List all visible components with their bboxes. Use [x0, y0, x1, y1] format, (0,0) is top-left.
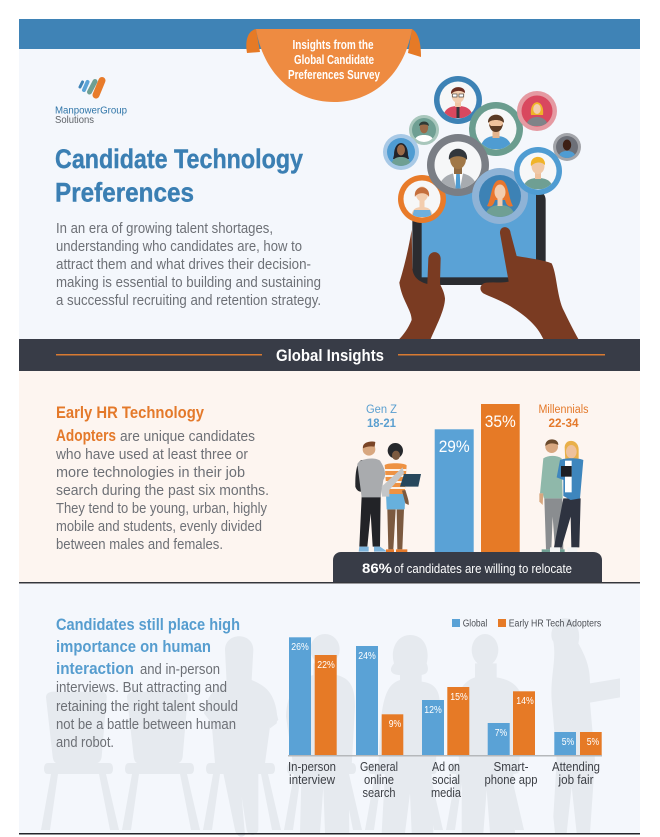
bar: Gen Z 29% [435, 429, 474, 552]
bar: Millennials 35% [481, 404, 520, 552]
logo: Solutions [55, 115, 94, 126]
intro text: understanding who candidates are, how to [56, 239, 302, 255]
background silhouettes [41, 618, 620, 837]
group: general online search: 24% [358, 651, 376, 662]
logo [55, 80, 127, 126]
group: in-person interview: 22% [317, 660, 335, 671]
top blue bar [19, 19, 640, 49]
legend: Global [463, 618, 487, 630]
group: smartphone app: phone app [484, 773, 538, 787]
title [55, 144, 303, 208]
label: Millennials [538, 404, 589, 430]
group: in-person interview [288, 637, 337, 787]
group: in-person interview: 26% [291, 642, 309, 653]
early adopters text: They tend to be young, urban, highly [56, 501, 268, 517]
human interaction text [56, 615, 240, 751]
group: in-person interview: interview [289, 773, 336, 787]
label: Millennials: 22-34 [548, 418, 579, 430]
people: Gen Z couple [355, 441, 421, 552]
intro text: attract them and what drives their decision- [56, 257, 311, 273]
survey banner: Preferences Survey [288, 67, 381, 82]
early adopters text: who have used at least three or [55, 447, 248, 463]
early adopters text: mobile and students, evenly divided [56, 519, 262, 535]
panel: header [19, 19, 640, 339]
group: general online search: search [362, 786, 396, 800]
callout: relocate: of candidates are willing to relocate [394, 561, 572, 576]
bar: Millennials 35%: 35% [485, 412, 516, 431]
group: general online search: online [364, 773, 394, 787]
early adopters text: more technologies in their job [56, 465, 245, 481]
group: smartphone app: 14% [516, 696, 534, 707]
group: general online search [356, 646, 403, 800]
bar: Gen Z 29%: 29% [439, 437, 470, 456]
group: ad on social media: social [432, 773, 460, 787]
survey banner [246, 29, 421, 102]
section band: Global Insights: Global Insights [276, 346, 384, 365]
panel: human interaction [19, 584, 640, 837]
group: smartphone app: 7% [495, 728, 507, 739]
illustration: tablet and hands [399, 190, 578, 339]
title: Preferences [55, 178, 194, 208]
avatar: bearded man [469, 102, 523, 156]
group: ad on social media: 15% [450, 692, 468, 703]
avatar: woman with dark hair [383, 134, 419, 170]
seated and standing people, right [270, 618, 620, 833]
panel: early adopters [19, 371, 640, 583]
label: Gen Z: Gen Z [366, 404, 397, 416]
intro text: a successful recruiting and retention strategy. [56, 293, 321, 309]
group: attending job fair [552, 732, 602, 787]
callout: relocate [333, 552, 602, 582]
early adopters text: between males and females. [56, 537, 223, 553]
legend: Early HR Tech Adopters [509, 618, 601, 630]
legend [452, 618, 601, 630]
group: ad on social media: 12% [424, 705, 442, 716]
early adopters text: are unique candidates [120, 429, 255, 445]
avatar: orange ring woman [398, 175, 446, 223]
avatar: man in suit [427, 134, 489, 196]
survey banner: Insights from the [292, 37, 374, 52]
people: Millennial couple [539, 439, 583, 552]
early adopters text [55, 403, 269, 553]
early adopters text: Adopters [56, 426, 116, 445]
group: general online search: General [360, 760, 398, 774]
group: attending job fair: job fair [558, 773, 594, 787]
group: attending job fair: 5% [587, 737, 599, 748]
group: smartphone app [484, 691, 538, 787]
intro text: In an era of growing talent shortages, [56, 221, 273, 237]
group: smartphone app: Smart- [494, 760, 528, 774]
intro text [56, 221, 321, 309]
label: Millennials: Millennials [538, 404, 589, 416]
group: ad on social media: Ad on [432, 760, 460, 774]
intro text: making is essential to building and sustaining [56, 275, 321, 291]
group: ad on social media: media [431, 786, 461, 800]
early adopters text: Early HR Technology [56, 403, 204, 422]
chair backs and seated person, left [46, 636, 278, 837]
human interaction text: and robot. [56, 735, 114, 751]
section band: Global Insights [19, 339, 640, 371]
avatar: man with glasses [434, 76, 482, 124]
bar chart [288, 637, 602, 800]
human interaction text: Candidates still place high [56, 615, 240, 634]
group: general online search: 9% [389, 719, 401, 730]
group: in-person interview: In-person [288, 760, 336, 774]
human interaction text: interaction [56, 659, 134, 678]
group: attending job fair: Attending [552, 760, 600, 774]
group: ad on social media [422, 687, 469, 800]
human interaction text: and in-person [140, 662, 220, 678]
avatars [383, 76, 581, 224]
divider [19, 582, 640, 584]
avatar: small green man [409, 115, 439, 145]
early adopters text: search during the past six months. [56, 483, 269, 499]
callout: relocate: 86% [362, 560, 393, 576]
avatar: blonde woman [517, 91, 557, 131]
avatar: blond man [514, 147, 562, 195]
title: Candidate Technology [55, 144, 303, 174]
logo: ManpowerGroup [55, 106, 127, 116]
label: Gen Z [366, 404, 397, 430]
survey banner: Global Candidate [294, 52, 374, 67]
label: Gen Z: 18-21 [367, 418, 397, 430]
avatar: redhead woman [472, 168, 528, 224]
human interaction text: not be a battle between human [56, 717, 236, 733]
group: attending job fair: 5% [562, 737, 574, 748]
avatar: dark grey man [553, 133, 581, 161]
human interaction text: interviews. But attracting and [56, 680, 227, 696]
human interaction text: importance on human [56, 637, 211, 656]
human interaction text: retaining the right talent should [56, 699, 238, 715]
chair seats and legs [41, 763, 524, 830]
